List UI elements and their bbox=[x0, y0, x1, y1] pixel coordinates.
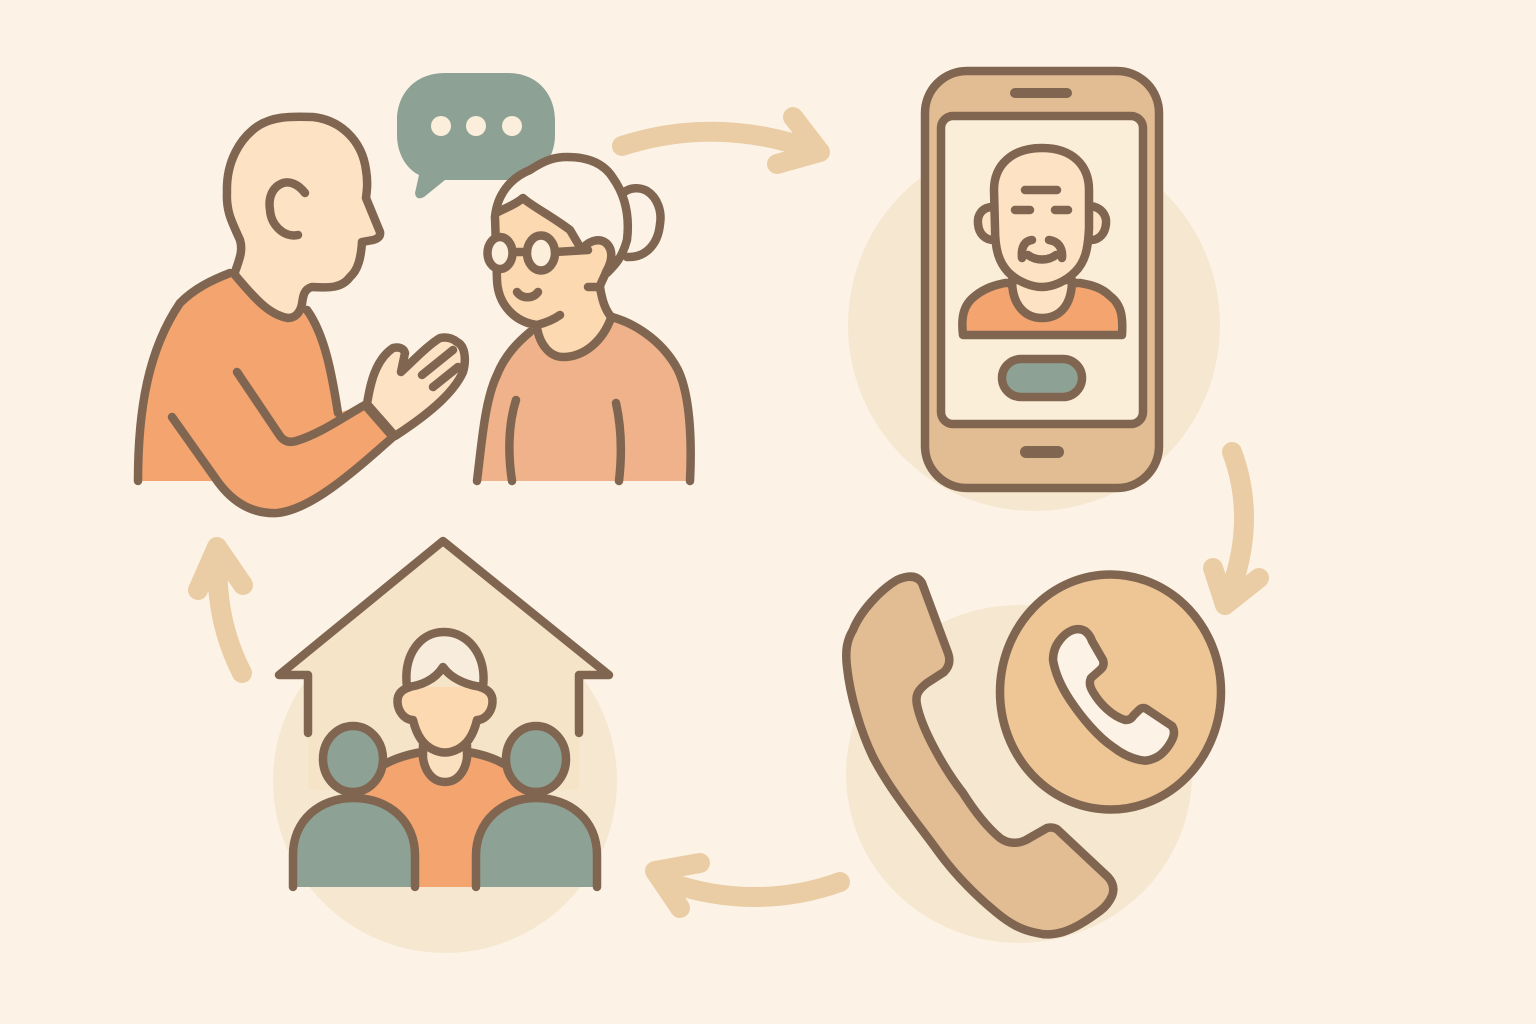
woman body bbox=[477, 317, 691, 481]
arrow: right bbox=[1213, 452, 1259, 605]
phone screen bbox=[941, 116, 1143, 424]
woman glasses bbox=[488, 236, 588, 270]
person neck bbox=[423, 745, 467, 782]
arrow: left bbox=[198, 547, 243, 673]
icon: speech bubble bbox=[397, 73, 555, 198]
handset bbox=[846, 577, 1113, 934]
illustration: telephone handset bbox=[846, 574, 1221, 934]
illustration: man talking bbox=[138, 117, 465, 513]
home button bbox=[1020, 446, 1064, 458]
arrow: top bbox=[622, 117, 820, 164]
woman hair bbox=[495, 157, 628, 273]
call button bbox=[1002, 359, 1082, 397]
call badge bbox=[1000, 574, 1221, 810]
arrow: bottom bbox=[655, 863, 840, 908]
illustration: family at home bbox=[278, 541, 609, 887]
phone body bbox=[925, 71, 1159, 488]
man arm lines bbox=[172, 372, 393, 513]
woman face bbox=[495, 198, 612, 357]
center person body bbox=[360, 752, 530, 887]
woman arm lines bbox=[509, 400, 621, 481]
phone speaker bbox=[1010, 88, 1072, 98]
contact portrait bbox=[962, 148, 1122, 335]
small phone glyph bbox=[1053, 629, 1174, 761]
circle backdrop: handset bbox=[846, 605, 1192, 943]
illustration: older woman bbox=[477, 157, 691, 481]
man hand bbox=[367, 338, 465, 436]
house bbox=[278, 541, 609, 790]
woman bun bbox=[623, 188, 660, 257]
person hair bbox=[406, 632, 484, 687]
circle backdrop: phone bbox=[848, 139, 1220, 511]
left teal person bbox=[293, 726, 415, 887]
illustration: smartphone bbox=[925, 71, 1159, 488]
right teal person bbox=[476, 726, 597, 887]
person head bbox=[398, 687, 492, 752]
man head bbox=[227, 117, 380, 318]
circle backdrop: family home bbox=[273, 609, 617, 953]
woman smile bbox=[517, 292, 538, 297]
man ear bbox=[270, 182, 305, 235]
man body bbox=[138, 272, 393, 513]
